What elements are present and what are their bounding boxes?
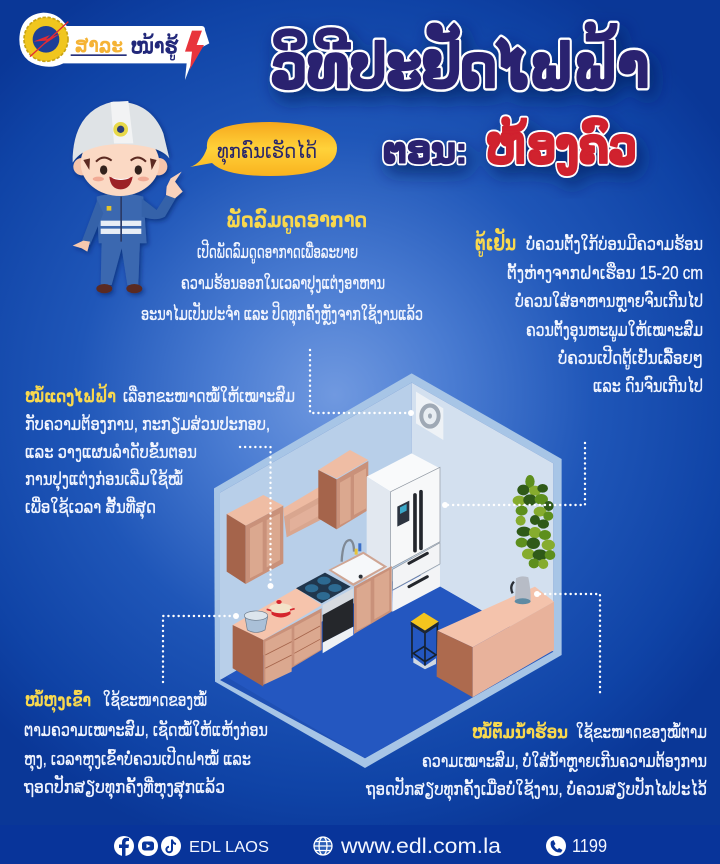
lower cabinet [354,566,392,634]
connector: refrigerator [442,438,585,508]
text: kettle: ໝໍ້ຕົ້ມນ້ຳຮ້ອນ [472,721,568,742]
text: electric pressure pot: ກັບຄວາມຕ້ອງການ, ກະກຽມສ່ວນປະກອບ, [25,413,270,434]
sink [328,540,387,586]
room frame [214,373,562,768]
plant [513,475,555,569]
legs [101,240,140,285]
text: kettle [365,721,707,802]
text: range hood: ອະນາໄມເປັນປະຈຳ ແລະ ປິດທຸກຄັ້ງຫຼັງຈາກໃຊ້ງານແລ້ວ [141,301,423,327]
text: electric pressure pot: ແລະ ວາງແຜນລຳດັບຂັ້ນຕອນ [25,441,197,462]
footer bar [0,825,720,864]
island counter [437,587,554,697]
logo: Sala Na Hu: ສາລະ [75,34,123,57]
text: rice cooker [23,689,268,800]
text: electric pressure pot: ການປຸງແຕ່ງກ່ອນເລີ່ມໃຊ້ໝໍ້ [25,469,183,492]
title: ວິທີປະຢັດໄຟຟ້າ [271,22,649,100]
footer label: EDL LAOS: EDL LAOS [189,839,269,856]
icon: facebook [114,836,134,856]
text: range hood [141,207,423,327]
subtitle: ຫ້ອງຄົວ [486,117,637,175]
text: rice cooker: ໃຊ້ຂະໜາດຂອງໝໍ້ [103,690,207,711]
logo: Sala Na Hu [19,13,209,80]
upper cabinets [227,450,368,584]
walls [220,383,412,680]
icon: youtube [138,836,158,856]
footer label: hotline: 1199 [572,836,607,856]
text: rice cooker: ຕາມຄວາມເໝາະສົມ, ເຊັດໝໍ້ໃຫ້ແຫ້ງກ່ອນ [24,719,268,741]
connector: fan [310,350,414,416]
floor [226,570,553,758]
kettle [511,576,531,604]
stool [411,613,439,669]
helmet [73,102,169,163]
red pot [267,600,295,617]
subtitle [383,117,637,175]
text: range hood: ພັດລົມດູດອາກາດ [226,207,367,234]
icon: globe [314,837,332,855]
footer label: website: www.edl.com.la [340,835,501,858]
kitchen illustration [214,373,562,768]
connector: pot [240,447,274,589]
text: refrigerator [475,227,703,396]
logo: Sala Na Hu: ໜ້າຮູ້ [131,33,179,60]
lower counter [233,588,322,687]
text: rice cooker: ຫຸງ, ເວລາຫຸງເຂົ້າບໍ່ຄວນເປີດຝາໝໍ້ ແລະ [24,747,251,772]
rice cooker [244,611,268,632]
hand left [73,241,90,252]
connector: rice cooker [163,613,239,682]
subtitle: ຫ້ອງຄົວ [486,117,637,175]
text: rice cooker: ໝໍ້ຫຸງເຂົ້າ [25,689,91,713]
face [73,158,91,175]
text: electric pressure pot: ເພື່ອໃຊ້ເວລາ ສັ້ນທີ່ສຸດ [25,496,156,520]
icon: phone [546,836,566,856]
character: engineer [73,101,183,293]
speech bubble [190,122,337,176]
subtitle: ຕອນ: [383,130,467,171]
text: refrigerator: ຕູ້ເຢັນ [475,227,516,257]
connector: kettle [534,591,600,695]
subtitle: ຕອນ: [383,130,467,171]
hand right [166,172,183,198]
text: electric pressure pot: ເລືອກຂະໜາດໝໍ້ໃຫ້ເໝາະສົມ [123,385,295,406]
text: electric pressure pot: ໝໍ້ແດງໄຟຟ້າ [25,383,116,406]
refrigerator [367,453,440,612]
text: electric pressure pot [25,383,295,520]
body [97,193,147,243]
text: range hood: ເປີດພັດລົມດູດອາກາດເພື່ອລະບາຍ [197,240,358,263]
stove and oven [296,573,353,653]
exhaust fan [416,392,443,440]
text: rice cooker: ຖອດປັກສຽບທຸກຄັ້ງທີ່ຫຸງສຸກແລ້ວ [23,774,225,800]
text: range hood: ຄວາມຮ້ອນອອກໃນເວລາປຸງແຕ່ງອາຫານ [181,273,385,296]
title: ວິທີປະຢັດໄຟຟ້າ [271,22,649,100]
speech bubble: ທຸກຄົນເຮັດໄດ້ [217,140,317,165]
icon: tiktok [161,836,181,856]
